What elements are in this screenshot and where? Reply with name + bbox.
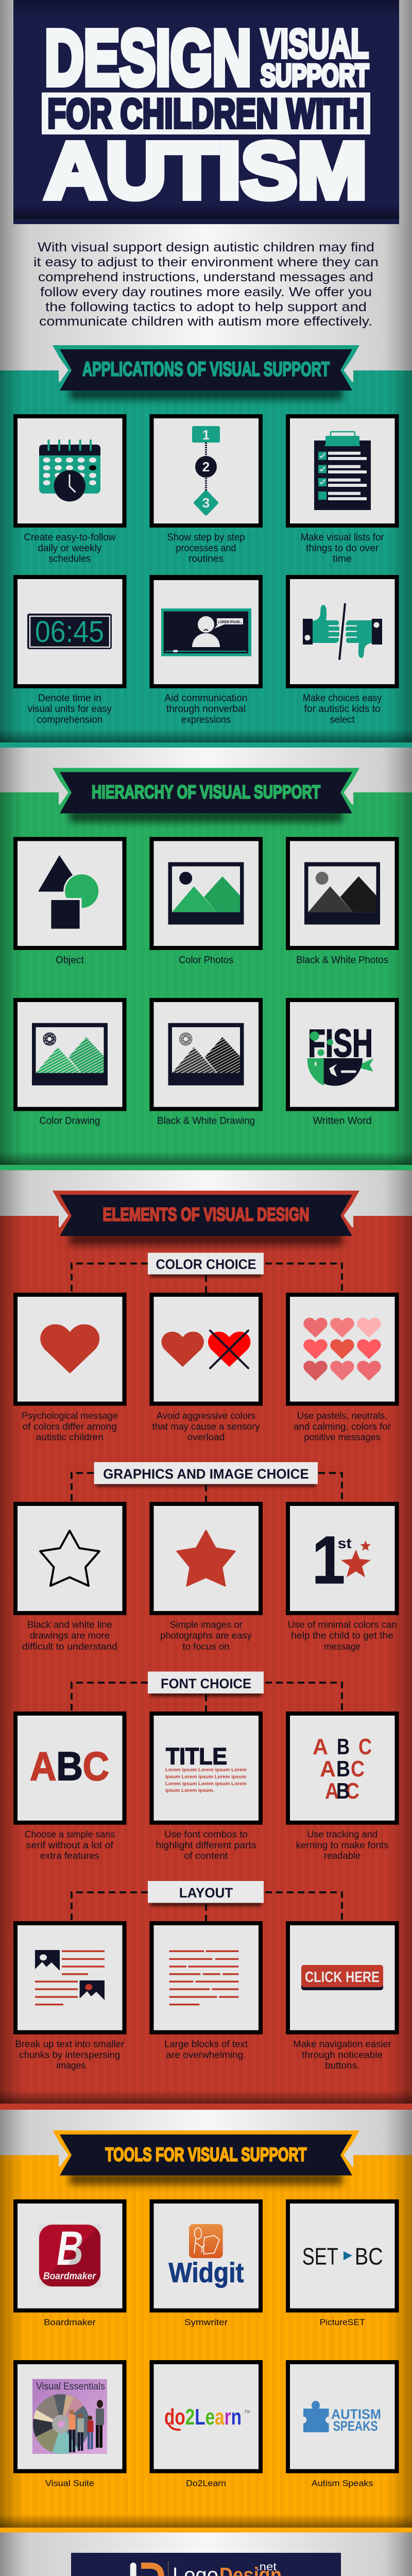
caption: and calming, colors for	[294, 1421, 391, 1432]
card: pastels	[286, 1293, 399, 1443]
card: do2learn	[149, 2360, 263, 2488]
card: object	[13, 837, 127, 965]
caption: difficult to understand	[22, 1641, 117, 1652]
caption: of content	[184, 1851, 228, 1861]
icon: numbered steps: 2	[202, 459, 210, 474]
caption: Simple images or	[170, 1620, 242, 1630]
caption: Use tracking and	[307, 1829, 377, 1840]
card: choices	[286, 575, 399, 725]
caption: PictureSET	[320, 2317, 365, 2327]
caption: comprehension	[37, 715, 102, 725]
caption	[28, 693, 112, 725]
icon: fish word: FISH	[308, 1022, 373, 1065]
icon: boardmaker logo	[39, 2225, 100, 2286]
icon: first place	[312, 1522, 371, 1598]
heading ribbon	[53, 768, 359, 814]
panel: footer	[71, 2553, 341, 2576]
card: visual suite	[13, 2360, 127, 2488]
intro text: comprehend instructions, understand messages and	[38, 270, 373, 284]
caption: Aid communication	[165, 693, 247, 704]
icon: click here button: CLICK HERE	[305, 1969, 380, 1986]
caption: that may cause a sensory	[152, 1421, 260, 1432]
icon: text block lines	[169, 1951, 238, 2005]
card: simple images	[149, 1502, 263, 1652]
title: visual: VISUAL	[261, 21, 369, 66]
card: aggressive colors	[149, 1293, 263, 1443]
intro text	[33, 240, 379, 329]
label: layout: LAYOUT	[179, 1885, 233, 1901]
card: psychological message	[13, 1293, 127, 1443]
caption: Autism Speaks	[312, 2478, 373, 2488]
icon: kerning letters: B	[336, 1778, 350, 1804]
logo wordmark: .net	[256, 2561, 277, 2573]
card: time units	[13, 575, 127, 725]
caption: extra features	[40, 1851, 99, 1861]
caption: Written Word	[313, 1116, 372, 1127]
title: design: DESIGN	[45, 14, 251, 101]
caption	[288, 1620, 397, 1652]
card: line drawings	[13, 1502, 127, 1652]
card: black and white photos	[286, 837, 399, 965]
caption: buttons.	[325, 2060, 359, 2071]
icon: video player: LOREM IPSUM...	[218, 619, 242, 624]
label: graphics and image choice: GRAPHICS AND IMAGE CHOICE	[103, 1466, 309, 1482]
connector: font choice	[72, 1683, 342, 1711]
ribbon shadow	[70, 387, 342, 400]
card: break up text	[13, 1921, 127, 2071]
panel: elements of visual design	[0, 1191, 412, 2110]
card: color photos	[149, 837, 263, 965]
caption: positive messages	[304, 1432, 381, 1443]
caption: processes and	[176, 543, 236, 554]
card: steps	[149, 414, 263, 565]
intro text: communicate children with autism more effectively.	[39, 314, 372, 329]
caption: Psychological message	[22, 1411, 118, 1421]
card: navigation buttons	[286, 1921, 399, 2071]
icon: title and body text: Lorem ipsum Lorem ipsum Lorem	[165, 1767, 247, 1773]
card: written word	[286, 998, 399, 1127]
ribbon shadow	[70, 2173, 342, 2185]
panel: applications of visual support	[0, 345, 412, 748]
panel: hierarchy of visual support	[0, 768, 412, 1171]
icon: fish word	[307, 1022, 374, 1086]
label: color choice	[148, 1253, 264, 1277]
caption: through nonverbal	[166, 704, 246, 715]
icon: video player	[161, 608, 251, 656]
icon: numbered steps: 3	[202, 495, 210, 511]
card: font combos	[149, 1711, 263, 1861]
icon: set bc logo: SET	[302, 2243, 338, 2270]
caption: Boardmaker	[44, 2317, 96, 2327]
icon: do2learn logo: TM	[244, 2410, 250, 2414]
icon: visual essentials cover	[32, 2379, 107, 2454]
caption	[167, 532, 245, 565]
caption	[303, 693, 382, 725]
card: sans serif	[13, 1711, 127, 1861]
connector: graphics choice	[72, 1473, 342, 1502]
caption: Make choices easy	[303, 693, 382, 704]
caption: Color Photos	[179, 955, 233, 965]
caption: images	[57, 2060, 85, 2071]
card: autism speaks	[286, 2360, 399, 2488]
icon: autism speaks logo	[300, 2401, 381, 2434]
caption: serif without a lot of	[26, 1840, 114, 1851]
caption: Object	[56, 955, 84, 965]
caption: Use of minimal colors can	[288, 1620, 397, 1630]
icon: kerning letters: A	[320, 1756, 336, 1782]
title: autism: AUTISM	[45, 126, 367, 215]
icon: title and body text: Lorem ipsum Lorem ipsum Lorem	[165, 1781, 247, 1787]
icon: heart	[40, 1324, 99, 1374]
card: tracking and kerning	[286, 1711, 399, 1861]
icon: set bc logo: BC	[355, 2243, 383, 2270]
caption: Show step by step	[167, 532, 245, 543]
icon: title and body text	[165, 1743, 247, 1793]
caption: Make navigation easier	[293, 2039, 391, 2049]
caption: for autistic kids to	[304, 704, 381, 715]
intro text: With visual support design autistic children may find	[38, 240, 374, 255]
caption	[22, 1411, 118, 1443]
caption: Black & White Photos	[296, 955, 388, 965]
icon: solid star	[177, 1531, 235, 1586]
caption: Do2Learn	[186, 2478, 226, 2488]
caption	[160, 1620, 252, 1652]
icon: autism speaks logo: SPEAKS	[333, 2418, 378, 2434]
caption: expressions	[181, 715, 231, 725]
icon: shapes	[38, 855, 99, 930]
caption	[156, 1829, 256, 1861]
heading ribbon	[53, 1191, 359, 1236]
icon: do2learn logo: do2Learn	[164, 2404, 242, 2430]
panel: title header	[13, 0, 399, 224]
caption: Use pastels, neutrals,	[297, 1411, 387, 1421]
label: layout	[148, 1881, 264, 1906]
icon: first place: st	[338, 1535, 352, 1551]
caption: highlight different parts	[156, 1840, 256, 1851]
icon: first place: 1	[312, 1522, 345, 1598]
icon: title and body text: TITLE	[166, 1743, 227, 1769]
caption	[296, 1829, 389, 1861]
caption	[164, 2039, 248, 2060]
icon: boardmaker logo: Boardmaker	[43, 2271, 96, 2282]
caption: kerning to make fonts	[296, 1840, 389, 1851]
card: lists	[286, 414, 399, 565]
caption: routines	[188, 553, 224, 565]
caption: schedules	[48, 553, 91, 565]
caption: drawings are more	[30, 1631, 110, 1641]
caption	[293, 2039, 391, 2071]
icon: title and body text: ipsum Lorem ipsum.	[165, 1788, 214, 1793]
caption	[25, 1829, 115, 1861]
connector: color choice	[72, 1263, 342, 1293]
icon: kerning letters	[313, 1734, 372, 1804]
logo wordmark	[173, 2561, 282, 2576]
label: font choice: FONT CHOICE	[161, 1676, 251, 1691]
icon: calendar and clock	[39, 440, 100, 502]
card: boardmaker	[13, 2199, 127, 2327]
icon: kerning letters: A	[313, 1734, 328, 1759]
label: font choice	[148, 1671, 264, 1697]
heading ribbon	[53, 2130, 359, 2175]
label: graphics and image choice	[94, 1462, 318, 1487]
caption: select	[330, 715, 355, 725]
icon: visual essentials cover: Visual Essentials	[36, 2381, 105, 2392]
title: support: SUPPORT	[261, 58, 369, 93]
icon: color photo	[168, 862, 244, 924]
icon: outline star	[40, 1531, 99, 1586]
icon: title and body text: ipsum Lorem ipsum Lorem ipsum	[165, 1774, 246, 1780]
icon: set bc logo	[302, 2243, 383, 2270]
icon: numbered steps: 1	[202, 427, 210, 443]
caption: are overwhelming.	[166, 2049, 246, 2060]
caption: readable	[324, 1851, 360, 1861]
logo divider	[168, 2561, 169, 2576]
caption: overload	[187, 1432, 225, 1443]
icon: kerning letters: C	[358, 1734, 372, 1759]
card: large text blocks	[149, 1921, 263, 2060]
icon: digital clock: 06:45	[35, 615, 104, 649]
card: schedules	[13, 414, 127, 565]
ribbon shadow	[70, 1233, 342, 1245]
caption: Break up text into smaller	[15, 2039, 124, 2049]
caption	[24, 532, 116, 565]
caption: Avoid aggressive colors	[157, 1411, 255, 1421]
caption: Denote time in	[38, 693, 101, 704]
people figures	[69, 2400, 104, 2452]
intro text: it easy to adjust to their environment where they can	[33, 255, 379, 269]
icon: widgit logo: Widgit	[169, 2258, 244, 2289]
caption: help the child to get the	[291, 1631, 393, 1641]
icon: abc letters: ABC	[30, 1743, 109, 1789]
caption: things to do over	[306, 543, 379, 554]
caption	[165, 693, 247, 725]
logo mark	[133, 2566, 161, 2576]
caption: message	[324, 1641, 360, 1652]
caption	[152, 1411, 260, 1443]
icon: kerning letters: C	[346, 1778, 359, 1804]
icon: click here button	[301, 1965, 383, 1990]
connector: layout	[72, 1892, 342, 1921]
caption: to focus on	[182, 1641, 230, 1652]
icon: color drawing	[32, 1023, 108, 1086]
caption	[15, 2039, 124, 2071]
icon: grayscale drawing	[168, 1023, 244, 1086]
caption: Visual Suite	[45, 2478, 94, 2488]
caption: autistic children	[36, 1432, 104, 1443]
heading ribbon: HIERARCHY OF VISUAL SUPPORT	[92, 782, 320, 803]
card: nonverbal expressions	[149, 575, 263, 725]
caption: chunks by interspersing	[19, 2049, 120, 2060]
caption: visual units for easy	[28, 704, 112, 715]
heading ribbon: ELEMENTS OF VISUAL DESIGN	[103, 1204, 309, 1225]
icon: clipboard checklist	[314, 432, 371, 510]
caption: Black & White Drawing	[157, 1116, 255, 1127]
caption: of colors differ among	[23, 1421, 117, 1432]
card: symwriter	[149, 2199, 263, 2327]
icon: kerning letters: C	[351, 1756, 365, 1782]
caption: Color Drawing	[39, 1116, 100, 1127]
icon: kerning letters: B	[337, 1734, 350, 1759]
card: pictureset	[286, 2199, 399, 2327]
heading ribbon	[53, 345, 359, 391]
card: minimal colors	[286, 1502, 399, 1652]
caption: Symwriter	[184, 2317, 228, 2327]
caption: through noticeable	[302, 2049, 383, 2060]
icon: widgit logo	[169, 2224, 244, 2289]
caption: Large blocks of text	[164, 2039, 248, 2049]
caption: Use font combos to	[164, 1829, 248, 1840]
caption: time	[333, 553, 352, 565]
icon: text with images	[35, 1950, 105, 2005]
caption	[22, 1620, 117, 1652]
icon: crossed out heart	[162, 1331, 250, 1368]
caption: Make visual lists for	[301, 532, 384, 543]
icon: autism speaks logo: AUTISM	[331, 2406, 381, 2422]
intro text: the following tactics to adopt to help support and	[45, 300, 367, 314]
heading ribbon: TOOLS FOR VISUAL SUPPORT	[105, 2144, 307, 2165]
card: color drawing	[13, 998, 127, 1127]
caption: Choose a simple sans	[25, 1829, 115, 1840]
caption	[294, 1411, 391, 1443]
label: color choice: COLOR CHOICE	[156, 1257, 256, 1272]
caption: Create easy-to-follow	[24, 532, 116, 543]
caption: daily or weekly	[38, 543, 102, 554]
caption: Black and white line	[27, 1620, 112, 1630]
icon: kerning letters: B	[336, 1756, 350, 1782]
intro text: follow every day routines more easily. We offer you	[40, 285, 372, 299]
caption: photographs are easy	[160, 1631, 252, 1641]
icon: kerning letters: A	[325, 1778, 339, 1804]
card: black and white drawing	[149, 998, 263, 1127]
icon: grayscale photo	[304, 862, 380, 924]
icon: numbered steps	[192, 426, 220, 515]
caption	[301, 532, 384, 565]
panel: tools for visual support	[0, 2130, 412, 2533]
icon: thumbs up and down	[303, 603, 382, 660]
ribbon shadow	[70, 810, 342, 822]
icon: boardmaker logo: B	[57, 2221, 83, 2275]
icon: pastel hearts	[303, 1318, 381, 1381]
